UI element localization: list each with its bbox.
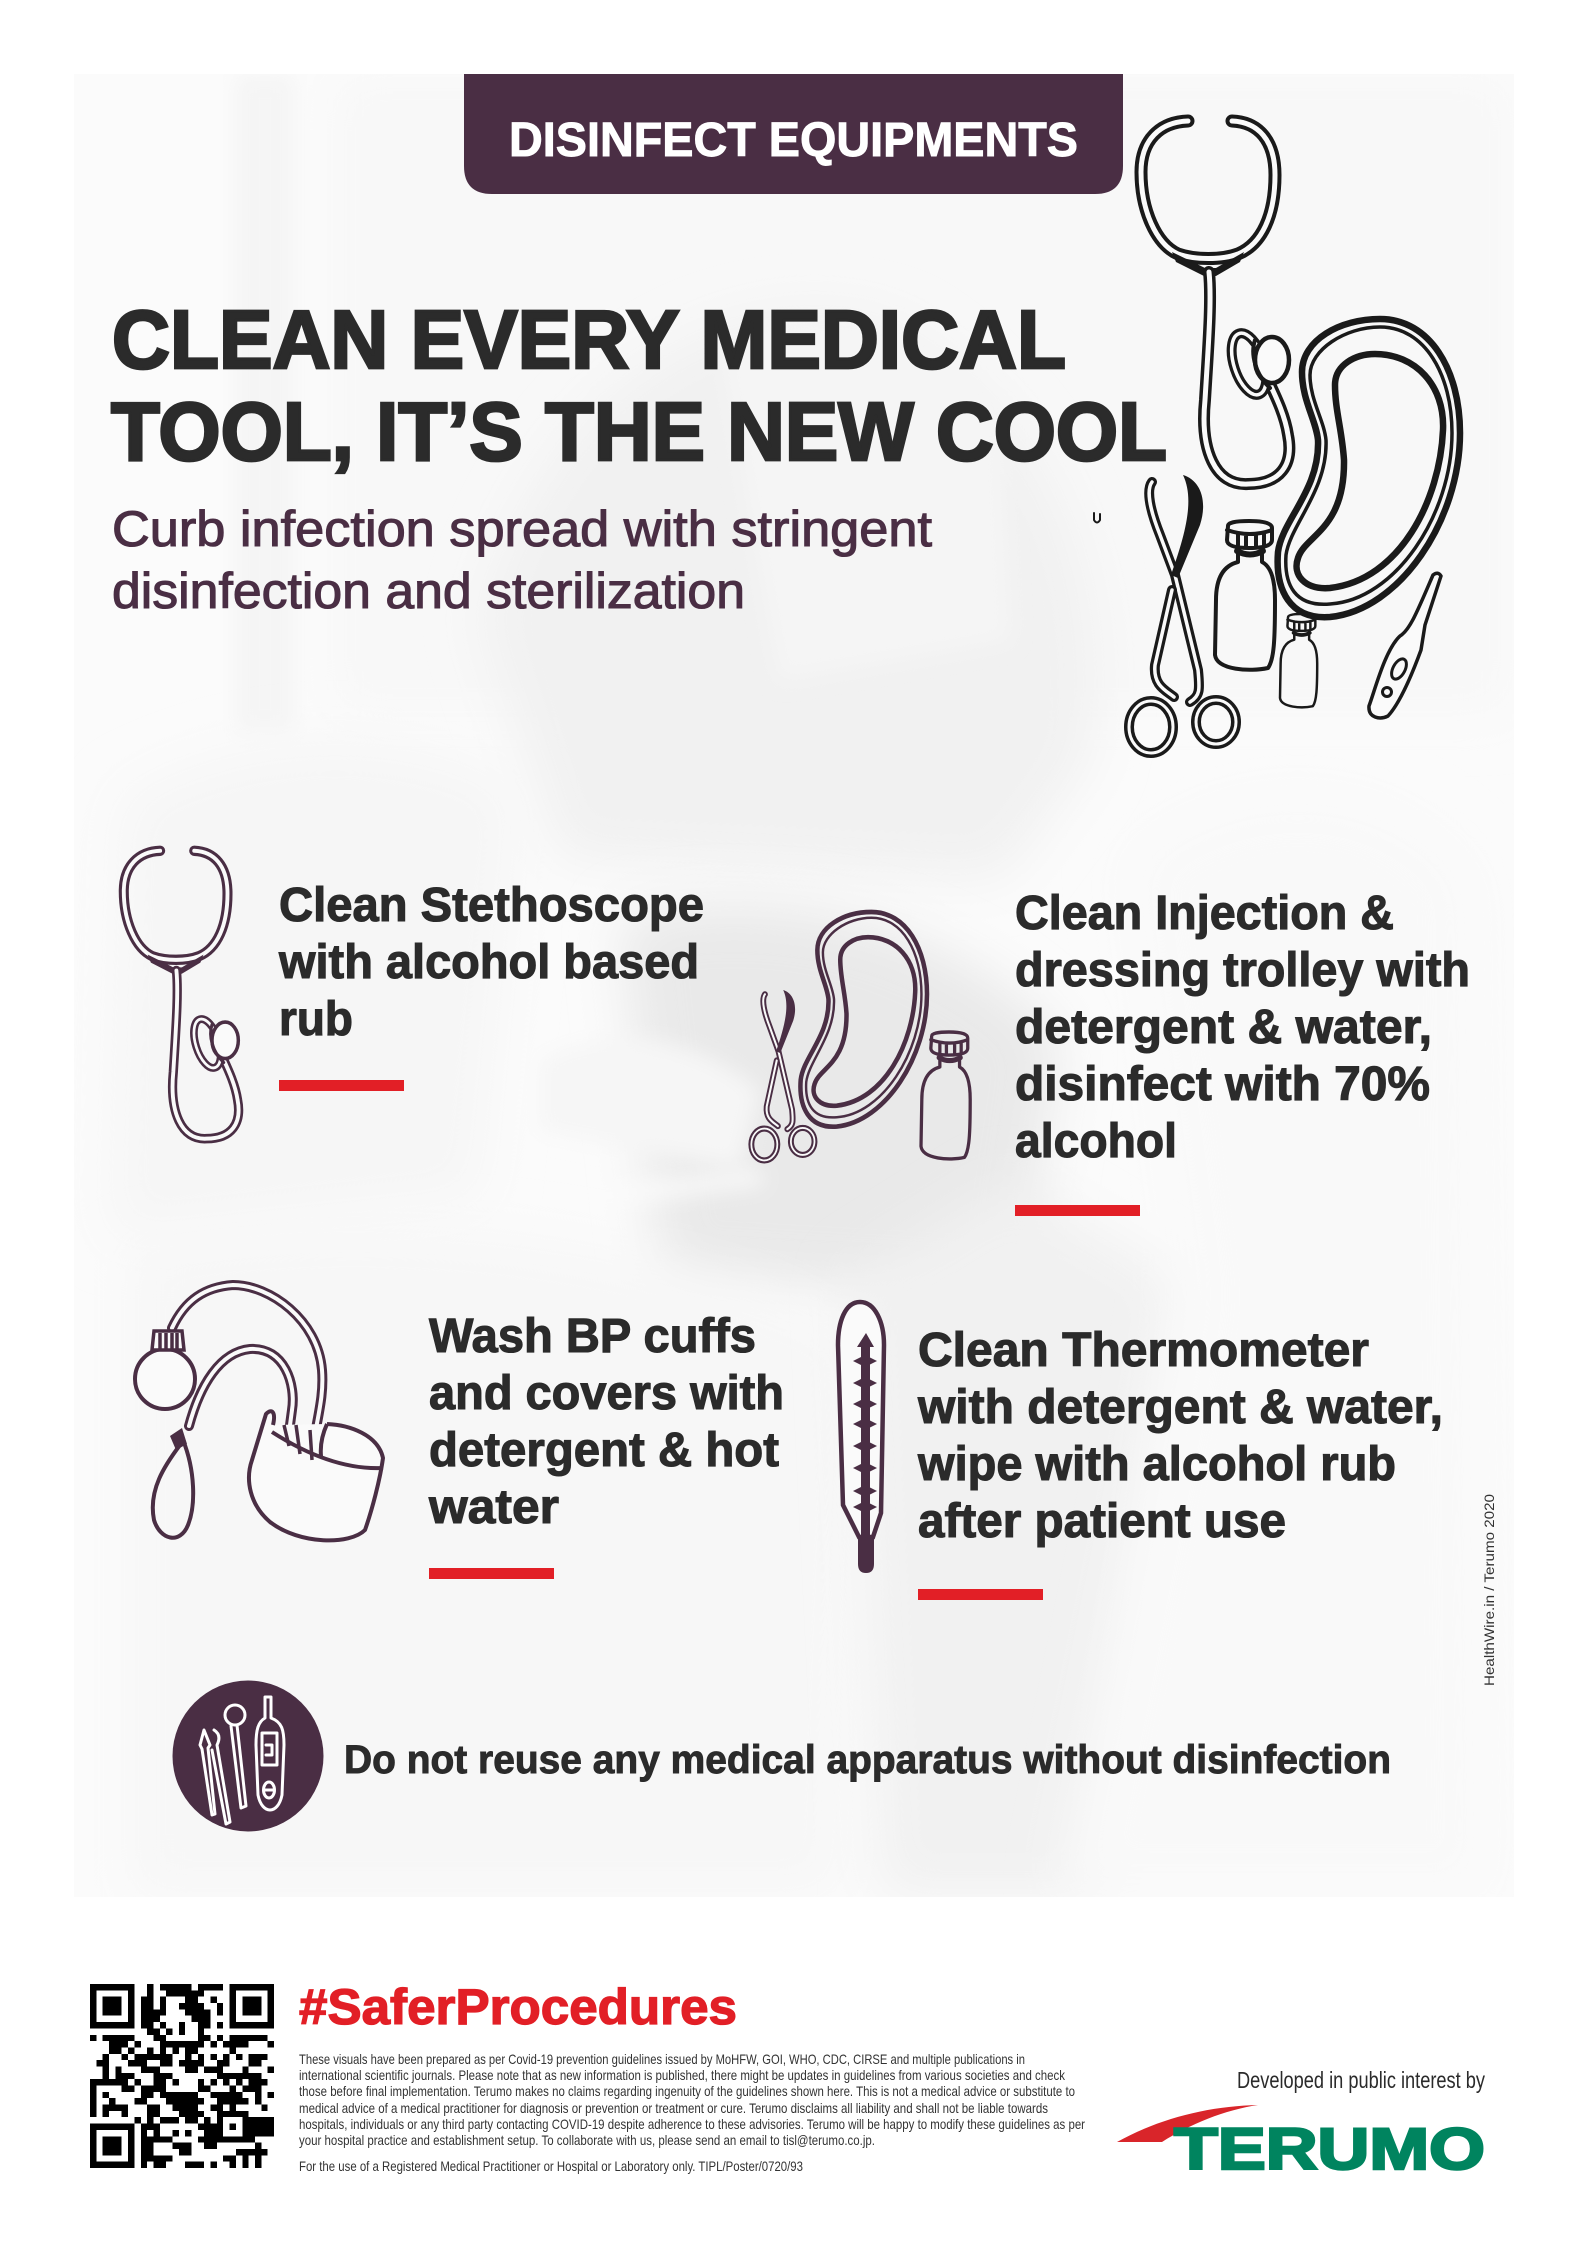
icon: tools in circle — [172, 1680, 324, 1832]
item: BP cuffs — [135, 1285, 784, 1579]
icon: stethoscope — [124, 851, 239, 1139]
subtitle: disinfection and sterilization — [112, 563, 745, 619]
disclaimer text: medical advice of a medical practitioner for diagnosis or prevention or treatment or cure. Terumo disclaims all liability and shall not be liable towards — [299, 2100, 1048, 2116]
disclaimer text: your hospital practice and establishment setup. To collaborate with us, please send an email to tisl@terumo.co.jp. — [299, 2132, 875, 2148]
text — [917, 1324, 1443, 1548]
disclaimer text: For the use of a Registered Medical Practitioner or Hospital or Laboratory only. TIPL/Poster/0720/93 — [299, 2158, 803, 2174]
text: with detergent & water, — [917, 1381, 1443, 1434]
text: alcohol — [1015, 1115, 1177, 1168]
red bar — [429, 1568, 554, 1579]
icon: bottle — [921, 1032, 970, 1159]
developed by: Developed in public interest by — [1237, 2067, 1485, 2093]
QR code — [90, 1984, 274, 2168]
text: dressing trolley with — [1015, 944, 1470, 997]
text: disinfect with 70% — [1015, 1058, 1430, 1111]
text: Do not reuse any medical apparatus without disinfection — [344, 1738, 1391, 1782]
icon: digital thermometer — [1369, 573, 1441, 718]
text: after patient use — [918, 1495, 1286, 1548]
text — [428, 1310, 784, 1534]
icon: forceps — [751, 990, 814, 1160]
text — [1015, 887, 1470, 1168]
text: Wash BP cuffs — [429, 1310, 756, 1363]
disclaimer text: hospitals, individuals or any third party contacting COVID-19 despite adherence to these advisories. Terumo will be happy to modify these guidelines as per — [299, 2116, 1085, 2132]
text: water — [428, 1481, 559, 1534]
text: rub — [279, 993, 353, 1046]
icon: large vial — [1215, 521, 1275, 670]
subtitle: Curb infection spread with stringent — [112, 501, 932, 557]
text: detergent & water, — [1015, 1001, 1432, 1054]
disclaimer text — [299, 2051, 1085, 2174]
text: with alcohol based — [278, 936, 699, 989]
icon: thermometer — [838, 1302, 884, 1573]
text: Clean Stethoscope — [279, 879, 704, 932]
red bar — [279, 1080, 404, 1091]
background photo panel — [124, 80, 1171, 1897]
header tab — [464, 74, 1123, 194]
text: Clean Thermometer — [918, 1324, 1369, 1377]
title: CLEAN EVERY MEDICAL — [112, 293, 1066, 386]
icon: kidney tray — [1278, 319, 1460, 617]
icon: small vial — [1280, 614, 1317, 707]
text: and covers with — [429, 1367, 784, 1420]
small mark — [1094, 513, 1100, 522]
red bar — [918, 1589, 1043, 1600]
subtitle — [112, 501, 932, 619]
header tab text: DISINFECT EQUIPMENTS — [509, 114, 1078, 167]
icon: stethoscope — [1141, 121, 1289, 484]
logo: Terumo: TERUMO — [1174, 2117, 1485, 2182]
logo: Terumo — [1117, 2105, 1485, 2182]
disclaimer text: international scientific journals. Please note that as new information is published, there might be updates in guidelines from various societies and check — [299, 2067, 1066, 2083]
disclaimer text: These visuals have been prepared as per Covid-19 prevention guidelines issued by MoHFW, GOI, WHO, CDC, CIRSE and multiple publications in — [299, 2051, 1025, 2067]
text: Clean Injection & — [1015, 887, 1394, 940]
item: clean stethoscope — [124, 851, 704, 1139]
icon: kidney tray — [800, 912, 927, 1127]
icon: forceps — [1129, 475, 1236, 753]
hashtag: #SaferProcedures — [299, 1979, 737, 2035]
title: TOOL, IT’S THE NEW COOL — [111, 385, 1167, 478]
item: clean thermometer — [838, 1302, 1443, 1600]
text — [278, 879, 704, 1046]
illustration: medical tools group — [1094, 121, 1460, 753]
disclaimer text: those before final implementation. Terumo makes no claims regarding ingenuity of the guidelines shown here. This is not a medical advice or substitute to — [299, 2083, 1075, 2099]
item: clean trolley — [751, 887, 1470, 1216]
icon: BP cuff — [135, 1285, 383, 1540]
text: wipe with alcohol rub — [917, 1438, 1396, 1491]
title — [111, 293, 1167, 478]
red bar — [1015, 1205, 1140, 1216]
callout: do not reuse — [172, 1680, 1391, 1832]
text: detergent & hot — [429, 1424, 779, 1477]
credit: vertical: HealthWire.in / Terumo 2020 — [1481, 1494, 1497, 1686]
